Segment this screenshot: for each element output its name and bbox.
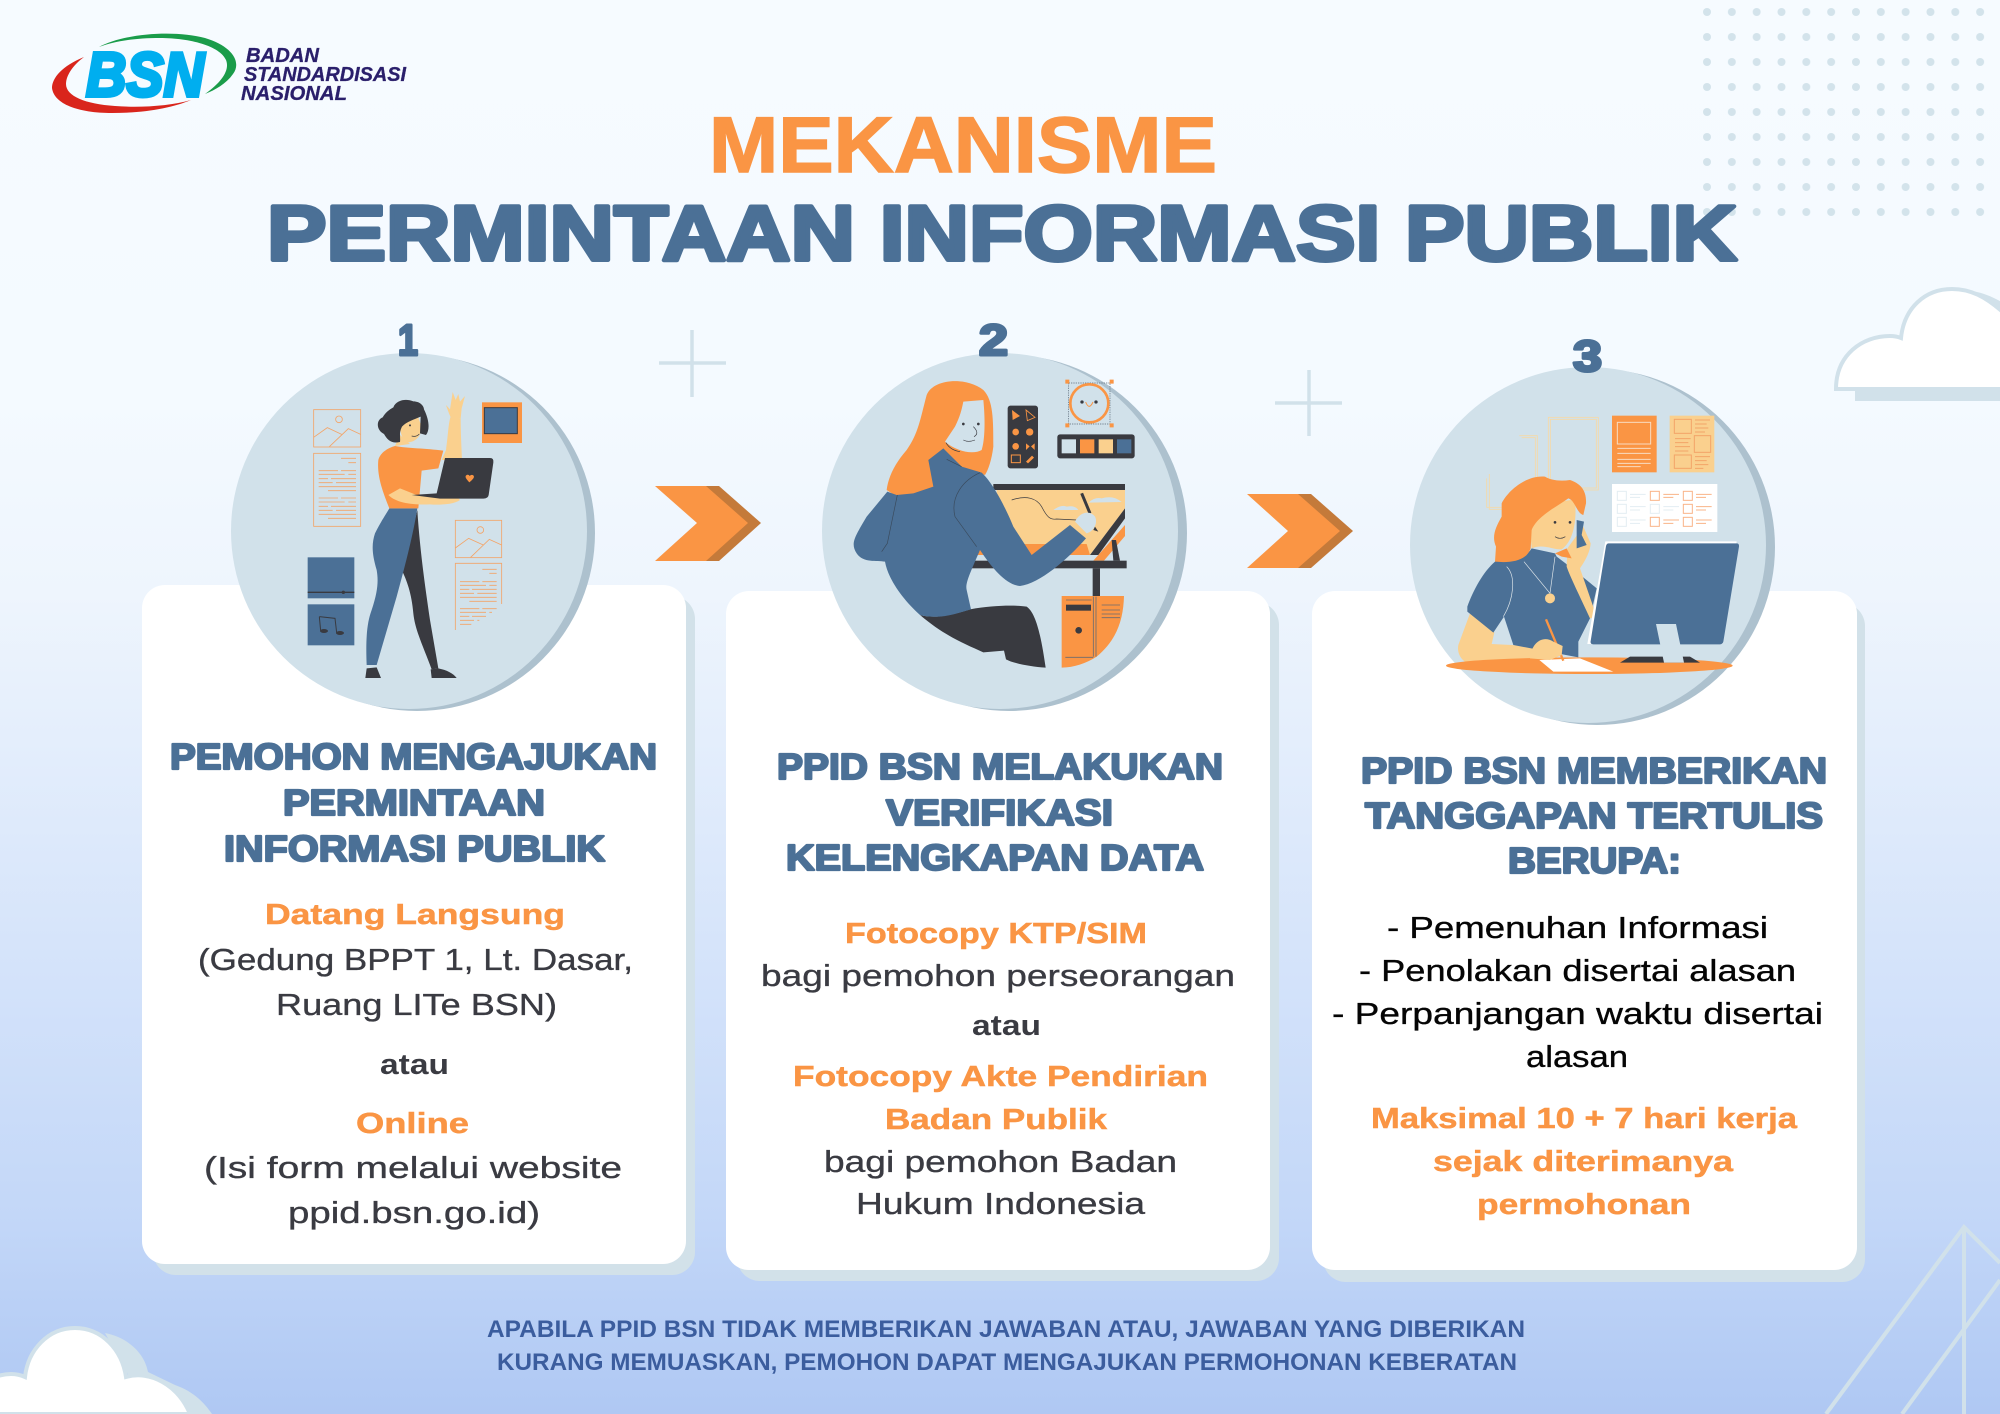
card <box>1312 591 1857 1270</box>
circle shadow <box>1419 369 1775 725</box>
number 2: 2 <box>979 316 1008 365</box>
footer note: KURANG MEMUASKAN, PEMOHON DAPAT MENGAJUKAN PERMOHONAN KEBERATAN <box>497 1349 1517 1376</box>
option: online: Online <box>356 1108 469 1140</box>
heading: BERUPA: <box>1508 840 1681 881</box>
card shadow <box>737 602 1279 1281</box>
cloud bottom left <box>0 1328 212 1414</box>
number 1: 1 <box>398 316 418 365</box>
heading <box>777 746 1223 878</box>
logo wordmark: BADAN <box>246 45 320 67</box>
circle shadow <box>831 355 1187 711</box>
arrow 1 <box>655 486 761 561</box>
card <box>142 585 686 1264</box>
response list <box>1332 910 1823 1074</box>
atau: atau <box>972 1010 1041 1042</box>
heading <box>170 736 657 869</box>
card <box>726 591 1270 1270</box>
panel: step 1 <box>142 316 695 1275</box>
plus decoration 2 <box>1275 370 1342 436</box>
arrow 2 <box>1247 494 1353 568</box>
heading: PEMOHON MENGAJUKAN <box>170 736 657 777</box>
footer note: APABILA PPID BSN TIDAK MEMBERIKAN JAWABAN ATAU, JAWABAN YANG DIBERIKAN <box>487 1316 1525 1343</box>
requirement: akte: Fotocopy Akte Pendirian <box>793 1061 1208 1093</box>
option: datang langsung: Ruang LITe BSN) <box>276 987 557 1022</box>
requirement: KTP/SIM: Fotocopy KTP/SIM <box>845 918 1147 950</box>
option: datang langsung: Datang Langsung <box>265 899 565 931</box>
illustration: woman with laptop <box>308 392 522 678</box>
triangle lines bottom right <box>1826 1227 2000 1414</box>
requirement: akte: bagi pemohon Badan <box>824 1144 1177 1179</box>
logo: BSN <box>52 34 406 113</box>
requirement: akte <box>793 1061 1208 1221</box>
heading: PERMINTAAN <box>283 782 545 823</box>
heading <box>1361 750 1827 881</box>
requirement: KTP/SIM <box>761 918 1235 993</box>
circle shadow <box>239 355 595 711</box>
option: datang langsung <box>198 899 633 1022</box>
response list: - Pemenuhan Informasi <box>1387 910 1768 945</box>
response list: - Perpanjangan waktu disertai <box>1332 996 1823 1031</box>
response list: alasan <box>1526 1039 1628 1074</box>
panel: step 2 <box>726 316 1279 1281</box>
logo letters: BSN <box>86 41 205 110</box>
footer note <box>487 1316 1525 1376</box>
dot pattern <box>1695 0 1993 225</box>
illustration: woman drawing <box>854 380 1135 668</box>
heading: VERIFIKASI <box>886 792 1113 833</box>
circle <box>822 353 1178 709</box>
title line 2: PERMINTAAN INFORMASI PUBLIK <box>267 189 1737 277</box>
heading: TANGGAPAN TERTULIS <box>1365 795 1823 836</box>
title <box>267 100 1737 277</box>
title line 1: MEKANISME <box>709 100 1217 189</box>
option: datang langsung: (Gedung BPPT 1, Lt. Dasar, <box>198 942 633 977</box>
option: online <box>204 1108 622 1230</box>
deadline: Maksimal 10 + 7 hari kerja <box>1371 1103 1798 1135</box>
requirement: akte: Badan Publik <box>885 1104 1108 1136</box>
illustration: woman on phone <box>1446 416 1739 674</box>
requirement: KTP/SIM: bagi pemohon perseorangan <box>761 958 1235 993</box>
heading: KELENGKAPAN DATA <box>786 837 1204 878</box>
requirement: akte: Hukum Indonesia <box>856 1186 1146 1221</box>
response list: - Penolakan disertai alasan <box>1359 953 1796 988</box>
plus decoration 1 <box>659 330 726 397</box>
logo wordmark: STANDARDISASI <box>244 64 406 86</box>
logo wordmark: NASIONAL <box>241 83 347 105</box>
option: online: ppid.bsn.go.id) <box>288 1195 540 1230</box>
deadline: permohonan <box>1477 1189 1691 1221</box>
number 3: 3 <box>1573 332 1602 381</box>
logo red arc <box>52 57 191 113</box>
atau: atau <box>380 1049 449 1081</box>
deadline: sejak diterimanya <box>1433 1146 1734 1178</box>
heading: PPID BSN MELAKUKAN <box>777 746 1223 787</box>
card shadow <box>1323 603 1865 1282</box>
panel: step 3 <box>1312 332 1865 1282</box>
card shadow <box>153 596 695 1275</box>
circle <box>231 353 587 709</box>
logo wordmark <box>241 45 406 105</box>
cloud top right <box>1836 289 2000 401</box>
heading: INFORMASI PUBLIK <box>224 828 605 869</box>
option: online: (Isi form melalui website <box>204 1150 622 1185</box>
deadline <box>1371 1103 1798 1221</box>
logo green arc <box>99 34 236 94</box>
circle <box>1410 367 1766 723</box>
heading: PPID BSN MEMBERIKAN <box>1361 750 1827 791</box>
